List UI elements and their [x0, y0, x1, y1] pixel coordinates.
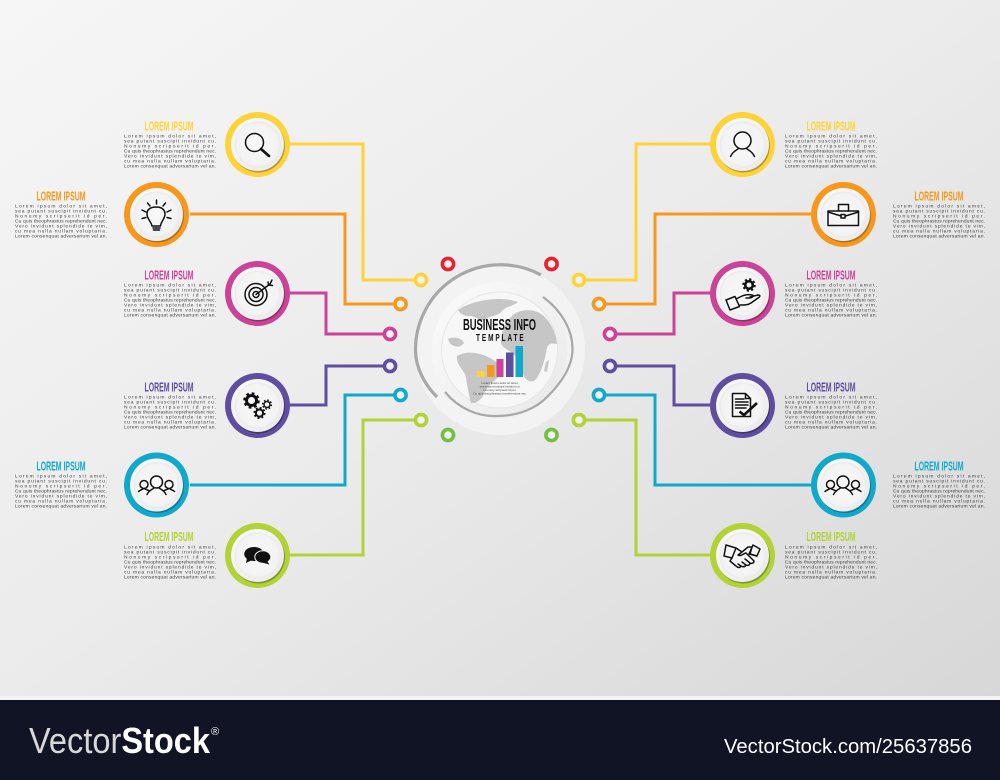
connector: purple right [616, 366, 711, 405]
badge [225, 261, 290, 326]
icon: magnifier [246, 134, 269, 156]
item: search, left [124, 112, 290, 177]
body text: Vero invidunt splendide te vim, [893, 224, 985, 230]
body text [893, 204, 985, 240]
body text: Nonumy scripserit id per. [785, 144, 877, 150]
badge [124, 182, 189, 247]
item: handshake, right [710, 523, 877, 588]
body text: Lorem consenquat adversarium vel an. [124, 164, 216, 170]
body text [785, 544, 877, 580]
body text: Cu quis theophrastus reprehendunt nec. [15, 488, 107, 494]
item: checklist document, right [710, 373, 877, 438]
body text: Lorem consenquat adversarium vel an. [15, 504, 107, 510]
body text: Nonumy scripserit id per. [785, 554, 877, 560]
body text [124, 544, 216, 580]
globe title: BUSINESS INFO [463, 317, 536, 334]
icon: hand with gear [726, 279, 760, 310]
body text: Lorem ipsum dolor sit amet, [893, 204, 985, 210]
body text: Lorem ipsum dolor sit amet, [124, 134, 216, 140]
body text [15, 204, 107, 240]
world map [448, 299, 557, 403]
body text [785, 394, 877, 430]
body text: sea putant suscipit invidunt cu. [893, 478, 985, 484]
body text: Vero invidunt splendide te vim, [785, 302, 877, 308]
body text: Vero invidunt splendide te vim, [785, 414, 877, 420]
icon: target [245, 280, 272, 306]
heading: LOREM IPSUM [36, 190, 86, 204]
body text: sea putant suscipit invidunt cu. [785, 138, 877, 144]
icon: handshake [724, 545, 760, 568]
body text [124, 282, 216, 318]
connector: orange left [190, 214, 394, 304]
body text: cu mea nulla nullam voluptaria. [893, 228, 985, 234]
item: target, left [124, 261, 290, 326]
body text: Vero invidunt splendide te vim, [124, 302, 216, 308]
heading: LOREM IPSUM [36, 460, 86, 474]
icon: document with check [732, 394, 757, 416]
body text: sea putant suscipit invidunt cu. [785, 288, 877, 294]
heading: LOREM IPSUM [806, 268, 856, 282]
body text: Lorem consenquat adversarium vel an. [893, 504, 985, 510]
body text: Nonumy scripserit id per. [785, 292, 877, 298]
body text: cu mea nulla nullam voluptaria. [15, 498, 107, 504]
body text: Cu quis theophrastus reprehendunt nec. [124, 560, 216, 566]
body text: cu mea nulla nullam voluptaria. [124, 570, 216, 576]
body text: Cu quis theophrastus reprehendunt nec. [785, 410, 877, 416]
body text: cu mea nulla nullam voluptaria. [124, 420, 216, 426]
badge [811, 452, 876, 518]
body text: cu mea nulla nullam voluptaria. [785, 308, 877, 314]
body text: Nonumy scripserit id per. [124, 292, 216, 298]
connector: orange right [605, 214, 811, 304]
body text: Vero invidunt splendide te vim, [785, 154, 877, 160]
body text: Vero invidunt splendide te vim, [785, 564, 877, 570]
connector: yellow left [290, 144, 415, 280]
body text: Lorem ipsum dolor sit amet, [15, 204, 107, 210]
body text: Nonumy scripserit id per. [893, 214, 985, 220]
badge [225, 523, 290, 588]
badge [710, 373, 775, 438]
body text: Lorem ipsum dolor sit amet, [785, 134, 877, 140]
globe caption [473, 381, 527, 396]
bar chart [477, 346, 523, 377]
item: team, left [15, 452, 189, 518]
body text: Cu quis theophrastus reprehendunt nec. [785, 560, 877, 566]
body text: Lorem ipsum dolor sit amet, [893, 474, 985, 480]
badge [124, 452, 189, 518]
connector: cyan left [190, 395, 394, 485]
icon: team [138, 476, 174, 494]
connector: yellow right [585, 144, 711, 280]
globe subtitle: TEMPLATE [476, 331, 524, 343]
body text: cu mea nulla nullam voluptaria. [785, 570, 877, 576]
body text: Lorem consenquat adversarium vel an. [785, 574, 877, 580]
body text: Nonumy scripserit id per. [124, 554, 216, 560]
connector: purple left [290, 366, 384, 405]
globe caption: Nonumy scripserit id per. [483, 388, 517, 392]
body text: Lorem consenquat adversarium vel an. [124, 312, 216, 318]
body text: Lorem ipsum dolor sit amet, [124, 394, 216, 400]
body text: Cu quis theophrastus reprehendunt nec. [785, 298, 877, 304]
body text [124, 134, 216, 170]
badge [710, 112, 775, 177]
body text [893, 474, 985, 510]
body text: Cu quis theophrastus reprehendunt nec. [15, 218, 107, 224]
central globe emblem [415, 265, 585, 435]
body text [785, 282, 877, 318]
body text: cu mea nulla nullam voluptaria. [893, 498, 985, 504]
body text: Nonumy scripserit id per. [15, 484, 107, 490]
item: chat, left [124, 523, 290, 588]
body text: sea putant suscipit invidunt cu. [785, 400, 877, 406]
body text: Lorem consenquat adversarium vel an. [785, 312, 877, 318]
body text: Lorem consenquat adversarium vel an. [124, 424, 216, 430]
body text: Lorem consenquat adversarium vel an. [785, 164, 877, 170]
icon: light bulb [142, 200, 171, 230]
node dots [384, 258, 616, 441]
body text: Lorem ipsum dolor sit amet, [124, 282, 216, 288]
icon: speech bubbles [244, 547, 271, 564]
badge [710, 523, 775, 588]
body text: Nonumy scripserit id per. [785, 404, 877, 410]
body text: sea putant suscipit invidunt cu. [124, 288, 216, 294]
body text: Vero invidunt splendide te vim, [124, 564, 216, 570]
icon: user [730, 132, 754, 156]
body text: Nonumy scripserit id per. [124, 144, 216, 150]
body text: Vero invidunt splendide te vim, [15, 224, 107, 230]
body text: cu mea nulla nullam voluptaria. [785, 420, 877, 426]
body text: sea putant suscipit invidunt cu. [124, 550, 216, 556]
body text: Vero invidunt splendide te vim, [124, 154, 216, 160]
body text: Cu quis theophrastus reprehendunt nec. [124, 148, 216, 154]
registered mark: ® [211, 726, 219, 738]
badge [710, 261, 775, 326]
body text: Cu quis theophrastus reprehendunt nec. [893, 218, 985, 224]
body text: cu mea nulla nullam voluptaria. [15, 228, 107, 234]
heading: LOREM IPSUM [806, 530, 856, 544]
connector: green right [585, 420, 711, 555]
body text: Lorem consenquat adversarium vel an. [15, 234, 107, 240]
body text: sea putant suscipit invidunt cu. [785, 550, 877, 556]
body text: Lorem ipsum dolor sit amet, [785, 544, 877, 550]
connector: magenta right [616, 293, 711, 334]
body text: Lorem ipsum dolor sit amet, [15, 474, 107, 480]
badge [225, 373, 290, 438]
body text: Lorem ipsum dolor sit amet, [124, 544, 216, 550]
body text: Lorem consenquat adversarium vel an. [785, 424, 877, 430]
badge [811, 182, 876, 247]
heading: LOREM IPSUM [144, 120, 194, 134]
body text [124, 394, 216, 430]
globe caption: sea putant suscipit invidunt cu. [480, 384, 521, 388]
globe caption: Cu quis theophrastus reprehendunt nec. [473, 392, 527, 396]
body text: sea putant suscipit invidunt cu. [124, 138, 216, 144]
body text: Cu quis theophrastus reprehendunt nec. [124, 410, 216, 416]
heading: LOREM IPSUM [806, 380, 856, 394]
body text: cu mea nulla nullam voluptaria. [785, 158, 877, 164]
heading: LOREM IPSUM [144, 268, 194, 282]
body text: Nonumy scripserit id per. [124, 404, 216, 410]
heading: LOREM IPSUM [806, 120, 856, 134]
item: team, right [811, 452, 985, 518]
footer bar [0, 700, 1000, 780]
body text: Nonumy scripserit id per. [15, 214, 107, 220]
item: briefcase, right [811, 182, 985, 247]
body text: Lorem ipsum dolor sit amet, [785, 282, 877, 288]
body text: Lorem consenquat adversarium vel an. [893, 234, 985, 240]
heading: LOREM IPSUM [144, 380, 194, 394]
footer logo: VectorStock [29, 720, 211, 761]
body text: Lorem ipsum dolor sit amet, [785, 394, 877, 400]
body text: Cu quis theophrastus reprehendunt nec. [124, 298, 216, 304]
icon: briefcase [828, 204, 858, 226]
globe caption: Lorem ipsum dolor sit amet, [481, 381, 519, 385]
body text [15, 474, 107, 510]
connector: green left [290, 420, 415, 555]
icon: team [825, 476, 861, 494]
body text: sea putant suscipit invidunt cu. [15, 208, 107, 214]
body text: cu mea nulla nullam voluptaria. [124, 158, 216, 164]
light strip [0, 696, 1000, 700]
body text: Vero invidunt splendide te vim, [15, 494, 107, 500]
body text: Cu quis theophrastus reprehendunt nec. [893, 488, 985, 494]
body text: Cu quis theophrastus reprehendunt nec. [785, 148, 877, 154]
body text: sea putant suscipit invidunt cu. [124, 400, 216, 406]
body text: Nonumy scripserit id per. [893, 484, 985, 490]
item: gears, left [124, 373, 290, 438]
item: idea, left [15, 182, 189, 247]
body text: Vero invidunt splendide te vim, [893, 494, 985, 500]
body text: cu mea nulla nullam voluptaria. [124, 308, 216, 314]
body text: sea putant suscipit invidunt cu. [15, 478, 107, 484]
body text [785, 134, 877, 170]
item: user, right [710, 112, 877, 177]
body text: Lorem consenquat adversarium vel an. [124, 574, 216, 580]
body text: sea putant suscipit invidunt cu. [893, 208, 985, 214]
connector: cyan right [605, 395, 811, 485]
item: hand and gear, right [710, 261, 877, 326]
icon: gears [244, 393, 271, 418]
body text: Vero invidunt splendide te vim, [124, 414, 216, 420]
heading: LOREM IPSUM [144, 530, 194, 544]
badge [225, 112, 290, 177]
connector: magenta left [290, 293, 384, 334]
footer id: VectorStock.com/25637856 [724, 736, 972, 758]
